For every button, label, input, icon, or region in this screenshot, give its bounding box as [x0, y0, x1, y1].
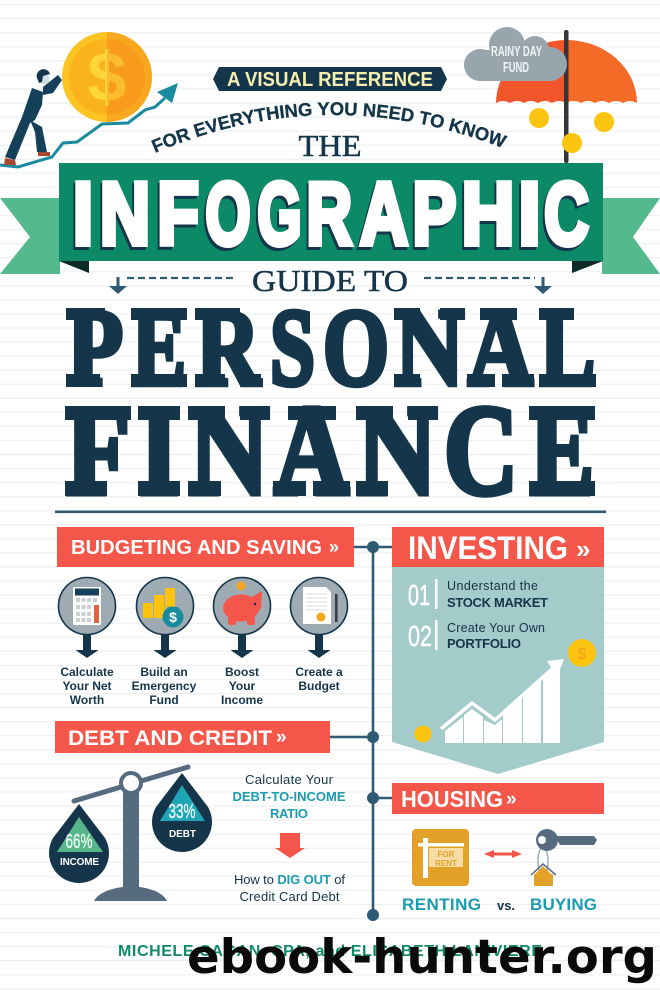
- heading: finance: N: [357, 378, 437, 522]
- section header: »: [329, 537, 339, 557]
- authors: MICHELE CAGAN, CPA, and ELISABETH LANIVIERE: [118, 943, 542, 960]
- man: [4, 69, 62, 165]
- label: build an emergency fund: Emergency: [132, 679, 197, 693]
- heading: infographic: I: [73, 164, 93, 263]
- label: calculate your net worth: Calculate: [60, 665, 114, 679]
- item 01: STOCK MARKET: [447, 595, 548, 610]
- heading: the: THE: [298, 128, 362, 163]
- heading: finance: E: [530, 378, 594, 522]
- heading: infographic: C: [544, 164, 589, 263]
- heading: personal: P: [67, 286, 123, 408]
- heading: personal: N: [395, 286, 464, 408]
- label: vs: vs.: [497, 898, 515, 913]
- heading: infographic: I: [516, 167, 538, 266]
- right arrow: [534, 277, 552, 294]
- heading: finance: I: [139, 378, 179, 522]
- text: calculate your debt-to-income ratio: [232, 772, 346, 821]
- heading: infographic: N: [100, 164, 150, 263]
- icon: budget document: [290, 578, 348, 634]
- item 02: 02: [408, 621, 432, 653]
- falling coins: [529, 108, 614, 153]
- cloud: FUND: [503, 59, 529, 76]
- label: boost your income: Boost: [225, 665, 259, 679]
- icon: for rent sign: FOR: [438, 850, 455, 859]
- section header: »: [276, 727, 287, 748]
- heading: infographic: P: [411, 167, 454, 266]
- arrow: double headed: [484, 850, 522, 858]
- heading: infographic: A: [360, 164, 408, 263]
- debt weight: 33%: [168, 801, 196, 823]
- heading: guide to with dashed arrows: [109, 263, 552, 298]
- section header: »: [576, 534, 590, 564]
- heading: personal: R: [196, 286, 261, 408]
- watermark: ebook-hunter.org: [187, 930, 657, 985]
- heading: infographic: A: [358, 167, 406, 266]
- item 02: [408, 620, 545, 653]
- panel: housing: [392, 783, 604, 914]
- icon: key with house keychain: [531, 829, 597, 886]
- ribbon folds: [59, 261, 603, 273]
- heading: personal: E: [132, 286, 186, 408]
- coin: $: [88, 38, 126, 116]
- heading: infographic: O: [206, 164, 250, 263]
- heading: infographic: [71, 164, 589, 266]
- section header: [55, 721, 330, 753]
- item 01: Understand the: [447, 579, 538, 593]
- coins: [414, 639, 596, 742]
- icon: for rent sign: [412, 829, 469, 886]
- text: how to dig out of credit card debt: How to DIG OUT of: [234, 872, 345, 887]
- section header: HOUSING: [401, 786, 503, 812]
- arrows below icons: [76, 634, 330, 658]
- curved subtitle: FOR EVERYTHING YOU NEED TO KNOW: [151, 102, 508, 153]
- label: build an emergency fund: Build an: [140, 665, 188, 679]
- heading: finance: [65, 378, 595, 522]
- heading: finance: N: [189, 378, 269, 522]
- heading: personal: A: [468, 286, 533, 408]
- section header: [57, 527, 354, 567]
- icon: savings bars and money bag: $: [169, 609, 177, 625]
- label: calculate your net worth: Your Net: [62, 679, 112, 693]
- label: boost your income: Your: [229, 679, 256, 693]
- income weight: [49, 804, 109, 883]
- section header: [392, 783, 604, 814]
- left arrow: [109, 277, 127, 294]
- coin: $: [88, 38, 126, 116]
- heading: infographic: F: [155, 167, 197, 266]
- heading: infographic: G: [256, 167, 300, 266]
- label: buying: BUYING: [530, 895, 597, 914]
- badge: a visual reference: A VISUAL REFERENCE: [227, 69, 433, 91]
- heading: personal: L: [540, 286, 595, 408]
- panel: budgeting and saving: [57, 527, 354, 707]
- debt weight: [152, 773, 212, 852]
- text: calculate your debt-to-income ratio: DEBT-TO-INCOME: [232, 789, 346, 804]
- item 02: PORTFOLIO: [447, 636, 521, 651]
- income weight: 66%: [66, 831, 93, 853]
- growth arrow: [0, 83, 178, 167]
- item 01: [408, 579, 548, 612]
- item 01: 01: [408, 580, 430, 612]
- scale post and base: [94, 783, 167, 901]
- coin: [62, 32, 152, 122]
- heading: infographic: H: [460, 167, 512, 266]
- section header: BUDGETING AND SAVING: [71, 537, 322, 559]
- heading: infographic: R: [304, 167, 350, 266]
- cloud: RAINY DAY: [491, 43, 542, 60]
- heading: finance: C: [444, 378, 518, 522]
- label: renting: RENTING: [402, 895, 481, 914]
- ribbon banner: [0, 163, 660, 274]
- heading: finance: F: [66, 378, 130, 522]
- heading: finance: A: [274, 378, 349, 522]
- heading: infographic: H: [462, 164, 514, 263]
- icon: man pushing coin up a growth arrow: [0, 32, 178, 167]
- umbrella canopy: [496, 40, 637, 103]
- text: how to dig out of credit card debt: Credit Card Debt: [240, 889, 340, 904]
- heading: infographic: G: [258, 164, 302, 263]
- coins: $: [578, 646, 587, 663]
- heading: infographic: P: [413, 164, 456, 263]
- heading: personal: [66, 286, 596, 408]
- panel: investing: [392, 527, 604, 774]
- label: calculate your net worth: Worth: [70, 693, 104, 707]
- text: calculate your debt-to-income ratio: RATIO: [270, 806, 308, 821]
- heading: infographic: N: [98, 167, 148, 266]
- icon: for rent sign: RENT: [435, 859, 457, 868]
- panel background: [392, 567, 604, 774]
- ribbon body: [59, 163, 603, 261]
- section header: INVESTING: [408, 530, 568, 566]
- icon: savings bars and money bag: [136, 578, 194, 634]
- text: calculate your debt-to-income ratio: Calculate Your: [245, 772, 334, 787]
- label: create a budget: Create a: [295, 665, 343, 679]
- icon: calculator: [58, 578, 116, 634]
- heading: infographic: R: [306, 164, 352, 263]
- text: how to dig out of credit card debt: [234, 872, 345, 904]
- heading: guide to with dashed arrows: GUIDE TO: [252, 263, 408, 298]
- section header: »: [506, 789, 517, 810]
- ribbon tails: [0, 198, 660, 274]
- panel: debt and credit: [49, 721, 346, 904]
- arrow: red down: [275, 833, 305, 858]
- label: build an emergency fund: Fund: [149, 693, 179, 707]
- heading: infographic: O: [204, 167, 248, 266]
- heading: infographic: I: [518, 164, 540, 263]
- icon: balance scale: [49, 767, 212, 901]
- cloud: [464, 27, 567, 81]
- umbrella pole: [564, 30, 568, 163]
- icon: umbrella with cloud and coins: [464, 27, 637, 163]
- debt weight: DEBT: [169, 829, 196, 840]
- chart: rising bars and arrow: [441, 659, 564, 743]
- item 02: Create Your Own: [447, 621, 545, 635]
- heading: personal: O: [323, 286, 389, 408]
- heading: infographic: F: [157, 164, 199, 263]
- heading: infographic: C: [542, 167, 587, 266]
- heading: personal: S: [270, 286, 315, 408]
- label: boost your income: Income: [221, 693, 263, 707]
- label: create a budget: Budget: [298, 679, 340, 693]
- section header: DEBT AND CREDIT: [68, 727, 272, 750]
- heading: infographic: I: [71, 167, 91, 266]
- icon: piggy bank: [214, 578, 270, 634]
- income weight: INCOME: [60, 857, 99, 868]
- timeline connectors: [330, 541, 392, 921]
